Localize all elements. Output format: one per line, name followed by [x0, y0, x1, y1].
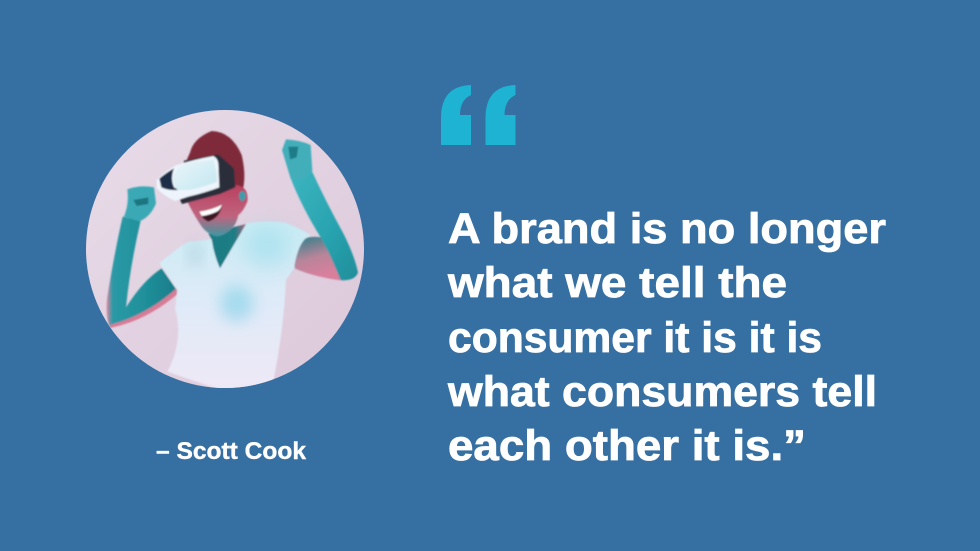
- attribution: – Scott Cook: [156, 438, 307, 465]
- headset dark side: [159, 168, 179, 190]
- quote text: what consumers tell: [447, 368, 877, 416]
- her right arm pink underside: [110, 289, 178, 328]
- quote text: each other it is.”: [448, 422, 806, 470]
- quote text: consumer it is it is: [448, 314, 822, 362]
- headset body: [157, 156, 219, 201]
- face: [187, 185, 248, 237]
- neck: [208, 224, 246, 268]
- photo: woman wearing VR headset in circle: [80, 100, 370, 395]
- headset visor: [173, 160, 217, 190]
- her left upper arm: [294, 237, 341, 280]
- headset strap: [180, 154, 235, 204]
- shirt: [159, 221, 311, 393]
- shirt shading: [220, 285, 253, 322]
- quote text: [447, 205, 886, 470]
- her right arm: [107, 217, 178, 327]
- her right fist: [124, 186, 156, 221]
- quote text: A brand is no longer: [448, 205, 886, 253]
- hair: [187, 131, 244, 197]
- ear: [239, 191, 246, 201]
- her left arm: [291, 171, 358, 280]
- quote text: what we tell the: [447, 259, 787, 307]
- icon: opening quotation mark: [441, 85, 516, 145]
- mouth: [199, 205, 222, 222]
- her left fist: [282, 139, 312, 180]
